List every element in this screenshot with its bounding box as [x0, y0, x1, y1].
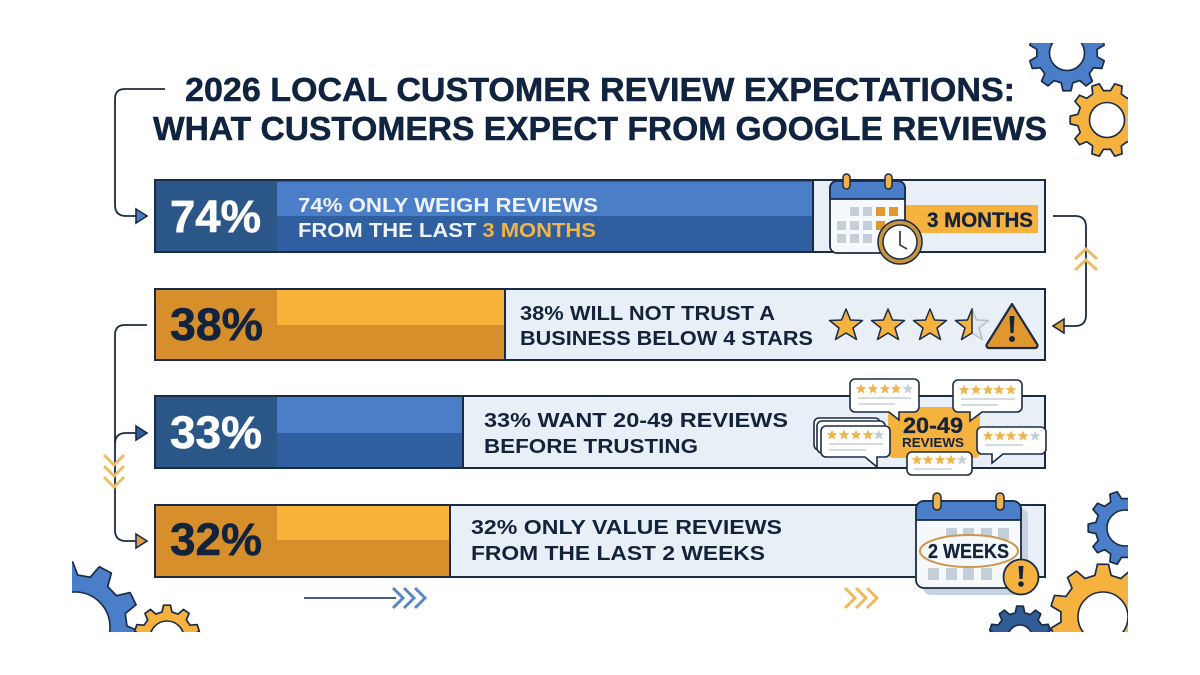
bubble: top left review [850, 379, 919, 420]
text: 74% description [298, 198, 598, 237]
text: 74% description: 74% ONLY WEIGH REVIEWS [298, 194, 598, 217]
chevrons: down on left connector [104, 455, 124, 487]
icon: review bubbles cluster [814, 379, 1046, 475]
text: 74% description: FROM THE LAST 3 MONTHS [298, 219, 596, 242]
gear: bottom right orange [1050, 563, 1128, 632]
arrow: 38% bar to 33% and 32% bars [115, 325, 147, 548]
text: 33% description: BEFORE TRUSTING [484, 435, 698, 458]
title [152, 78, 1046, 140]
text: 32% description: FROM THE LAST 2 WEEKS [471, 542, 765, 565]
badge: 20-49 reviews: REVIEWS [902, 435, 964, 450]
label: 2 weeks circled: 2 WEEKS [928, 541, 1009, 563]
text: 33% description [484, 413, 788, 453]
arrow: bottom blue chevrons [304, 588, 425, 608]
gear: bottom left blue [72, 561, 137, 632]
text: 33% description: 33% WANT 20-49 REVIEWS [484, 409, 788, 432]
chevrons: up between 74% and 38% [1075, 249, 1097, 270]
panel: 74% bar [155, 174, 1045, 264]
stat: 33%: 33% [170, 407, 262, 458]
panel: 38% bar [155, 289, 1045, 360]
text: 38% description: 38% WILL NOT TRUST A [520, 302, 775, 325]
panel: 33% bar [155, 379, 1046, 475]
icon: 2 weeks calendar [916, 493, 1038, 595]
label: 3 months: 3 MONTHS [927, 209, 1033, 232]
bubble: right review [977, 427, 1046, 463]
text: 38% description: BUSINESS BELOW 4 STARS [520, 327, 813, 350]
icon: star rating [830, 309, 988, 340]
chevrons: bottom orange [845, 588, 877, 608]
badge: 20-49 reviews: 20-49 [903, 413, 963, 438]
title: 2026 LOCAL CUSTOMER REVIEW EXPECTATIONS: [185, 72, 1015, 109]
gear: bottom right blue [1087, 491, 1128, 565]
arrow: 74% bar to 38% bar [1053, 216, 1086, 333]
gear: bottom left orange [134, 604, 200, 632]
panel: 32% bar [104, 89, 1097, 608]
label: 3 months [900, 205, 1038, 233]
text: 32% description: 32% ONLY VALUE REVIEWS [471, 516, 782, 539]
arrow: title to 74% bar [115, 89, 165, 223]
gear: bottom right dark blue [988, 605, 1052, 632]
stat: 38%: 38% [170, 299, 263, 350]
stat: 74%: 74% [170, 191, 261, 242]
badge: 20-49 reviews [888, 407, 980, 458]
text: 32% description [472, 520, 781, 560]
icon: warning triangle [987, 304, 1038, 348]
bubble: top right review [953, 380, 1022, 421]
gear: top right orange [1069, 83, 1128, 157]
bubble: stacked left reviews [814, 418, 890, 467]
text: 38% description [520, 306, 812, 345]
title: WHAT CUSTOMERS EXPECT FROM GOOGLE REVIEWS [153, 111, 1047, 148]
icon: calendar with clock [830, 174, 922, 264]
gear: top right blue [1028, 43, 1106, 92]
icon: exclamation badge [1004, 560, 1038, 594]
stat: 32%: 32% [170, 514, 262, 565]
bubble: bottom review [907, 452, 972, 475]
